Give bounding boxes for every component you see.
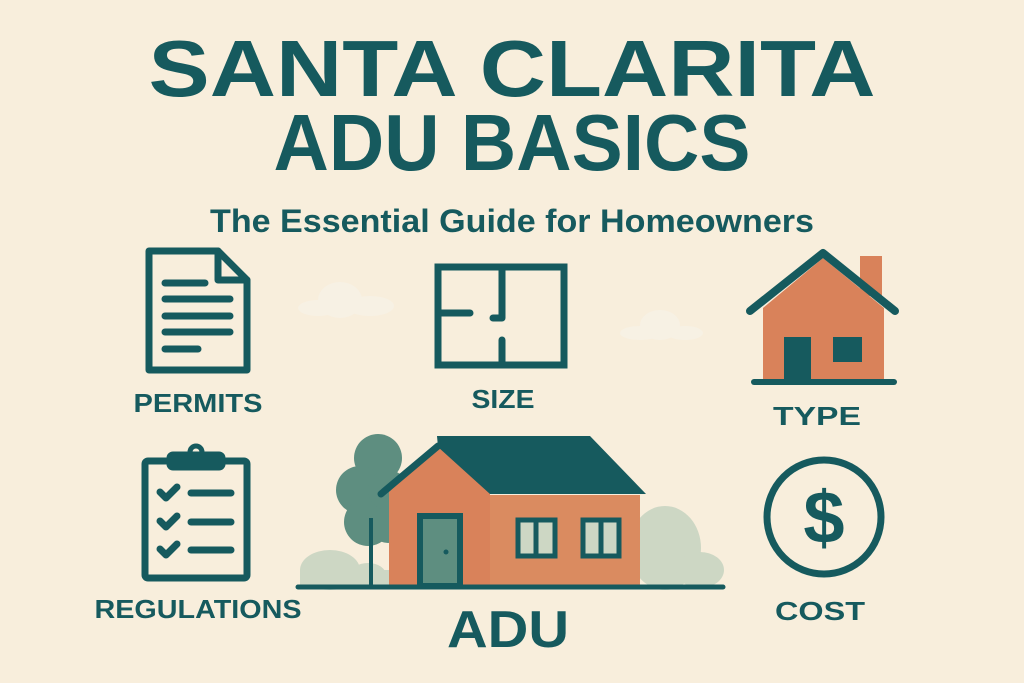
house body [489, 495, 640, 586]
tree [336, 434, 408, 546]
icon: type house [750, 253, 895, 382]
door [420, 516, 460, 586]
icon: clipboard [145, 446, 247, 578]
icon: permits document [149, 251, 247, 370]
icon: cost dollar: $ [803, 476, 845, 559]
cloud left [298, 282, 394, 318]
icon: floor plan [438, 267, 564, 365]
title: ADU BASICS [274, 98, 750, 187]
label: size: SIZE [472, 384, 534, 414]
bushes [300, 506, 724, 590]
windows [518, 520, 619, 556]
title [148, 24, 876, 187]
label: ADU: ADU [447, 601, 569, 659]
subtitle: The Essential Guide for Homeowners [210, 203, 814, 239]
icon: cost dollar [767, 460, 881, 574]
label: cost: COST [775, 596, 865, 626]
label: regulations: REGULATIONS [94, 594, 302, 624]
title: SANTA CLARITA [148, 24, 876, 113]
ground line [298, 584, 723, 590]
label: permits: PERMITS [134, 388, 262, 418]
roof [437, 436, 646, 494]
label: type: TYPE [773, 401, 861, 431]
main ADU house illustration [298, 434, 724, 590]
cloud right [620, 310, 703, 340]
